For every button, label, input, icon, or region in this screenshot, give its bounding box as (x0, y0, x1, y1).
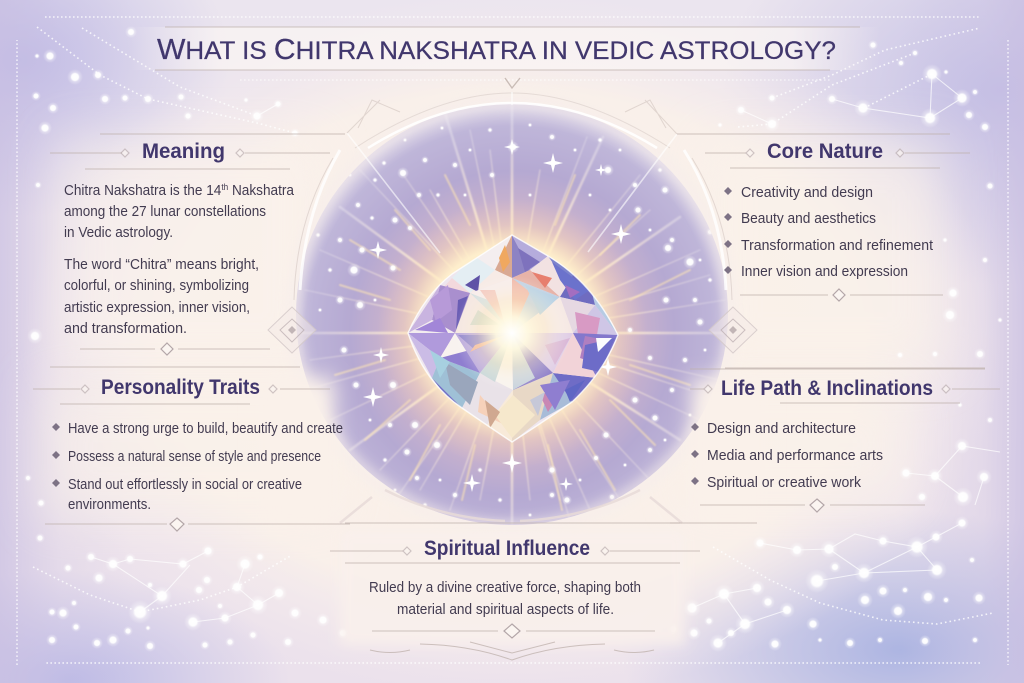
bullet list: traits: Possess a natural sense of style and presence (68, 448, 321, 465)
constellation: top right (717, 28, 991, 133)
central cosmic disc with rays and stars (296, 104, 728, 525)
constellation: bottom right (667, 438, 1000, 652)
ornament: right side diamond (709, 307, 757, 353)
gem crown facets (408, 235, 618, 442)
bullet list: core nature: Beauty and aesthetics (741, 210, 876, 227)
bullet list: core nature: Inner vision and expression (741, 263, 908, 280)
body text: word meaning (64, 256, 259, 337)
bullet list: core nature: Creativity and design (741, 184, 873, 201)
panel: Core Nature (677, 134, 985, 368)
frame lines around central disc (294, 78, 732, 523)
body text: definition (64, 182, 295, 241)
bullet list: inclinations: Design and architecture (707, 420, 856, 437)
panel: Life Path and Inclinations (670, 369, 1000, 523)
body text: word meaning: and transformation. (64, 320, 187, 337)
scattered side stars (24, 181, 1003, 543)
ornament: left side diamond (268, 307, 316, 353)
heading: Meaning: Meaning (142, 140, 225, 163)
body text: definition: Nakshatra (228, 182, 295, 199)
title banner (130, 27, 880, 70)
body text: word meaning: The word “Chitra” means bright, (64, 256, 259, 273)
bullet list: inclinations (691, 420, 883, 491)
title: WHAT IS CHITRA NAKSHATRA IN VEDIC ASTROLOGY? (157, 34, 836, 66)
panel: Meaning (50, 134, 345, 367)
body text: spiritual influence (369, 579, 641, 618)
bullet list: core nature (724, 184, 934, 280)
bullet list: traits: environments. (68, 496, 151, 513)
disc stars (315, 122, 714, 518)
gem pavilion facets (408, 333, 455, 358)
diamond gem (400, 230, 625, 445)
gem table wedges (476, 290, 478, 292)
gold rays (335, 175, 690, 510)
heading: Core Nature: Core Nature (767, 140, 883, 163)
bullet list: traits: Stand out effortlessly in social or creative (68, 476, 302, 493)
body text: definition: th (221, 182, 228, 192)
disc edge feathering and lower panel fades (262, 101, 762, 645)
heading: Personality Traits: Personality Traits (101, 376, 260, 399)
body text: spiritual influence: Ruled by a divine creative force, shaping both (369, 579, 641, 596)
body text: word meaning: colorful, or shining, symbolizing (64, 277, 249, 294)
constellation: top left (31, 26, 300, 138)
bullet list: inclinations: Spiritual or creative work (707, 474, 861, 491)
bullet list: inclinations: Media and performance arts (707, 447, 883, 464)
panel: Personality Traits (33, 376, 350, 531)
heading: Spiritual Influence: Spiritual Influence (424, 537, 590, 560)
light rays (300, 105, 725, 523)
bullet list: traits: Have a strong urge to build, beautify and create (68, 420, 343, 437)
bullet list: traits (52, 420, 343, 513)
bullet list: core nature: Transformation and refinement (741, 237, 934, 254)
panel: Spiritual Influence (330, 523, 700, 660)
body text: definition: in Vedic astrology. (64, 224, 173, 241)
body text: word meaning: artistic expression, inner vision, (64, 299, 250, 316)
heading: Life Path and Inclinations: Life Path & Inclinations (721, 377, 933, 400)
body text: spiritual influence: material and spiritual aspects of life. (397, 601, 614, 618)
body text: definition: Chitra Nakshatra is the 14 (64, 182, 237, 199)
constellation: bottom left (33, 544, 349, 652)
body text: definition: among the 27 lunar constellations (64, 203, 266, 220)
